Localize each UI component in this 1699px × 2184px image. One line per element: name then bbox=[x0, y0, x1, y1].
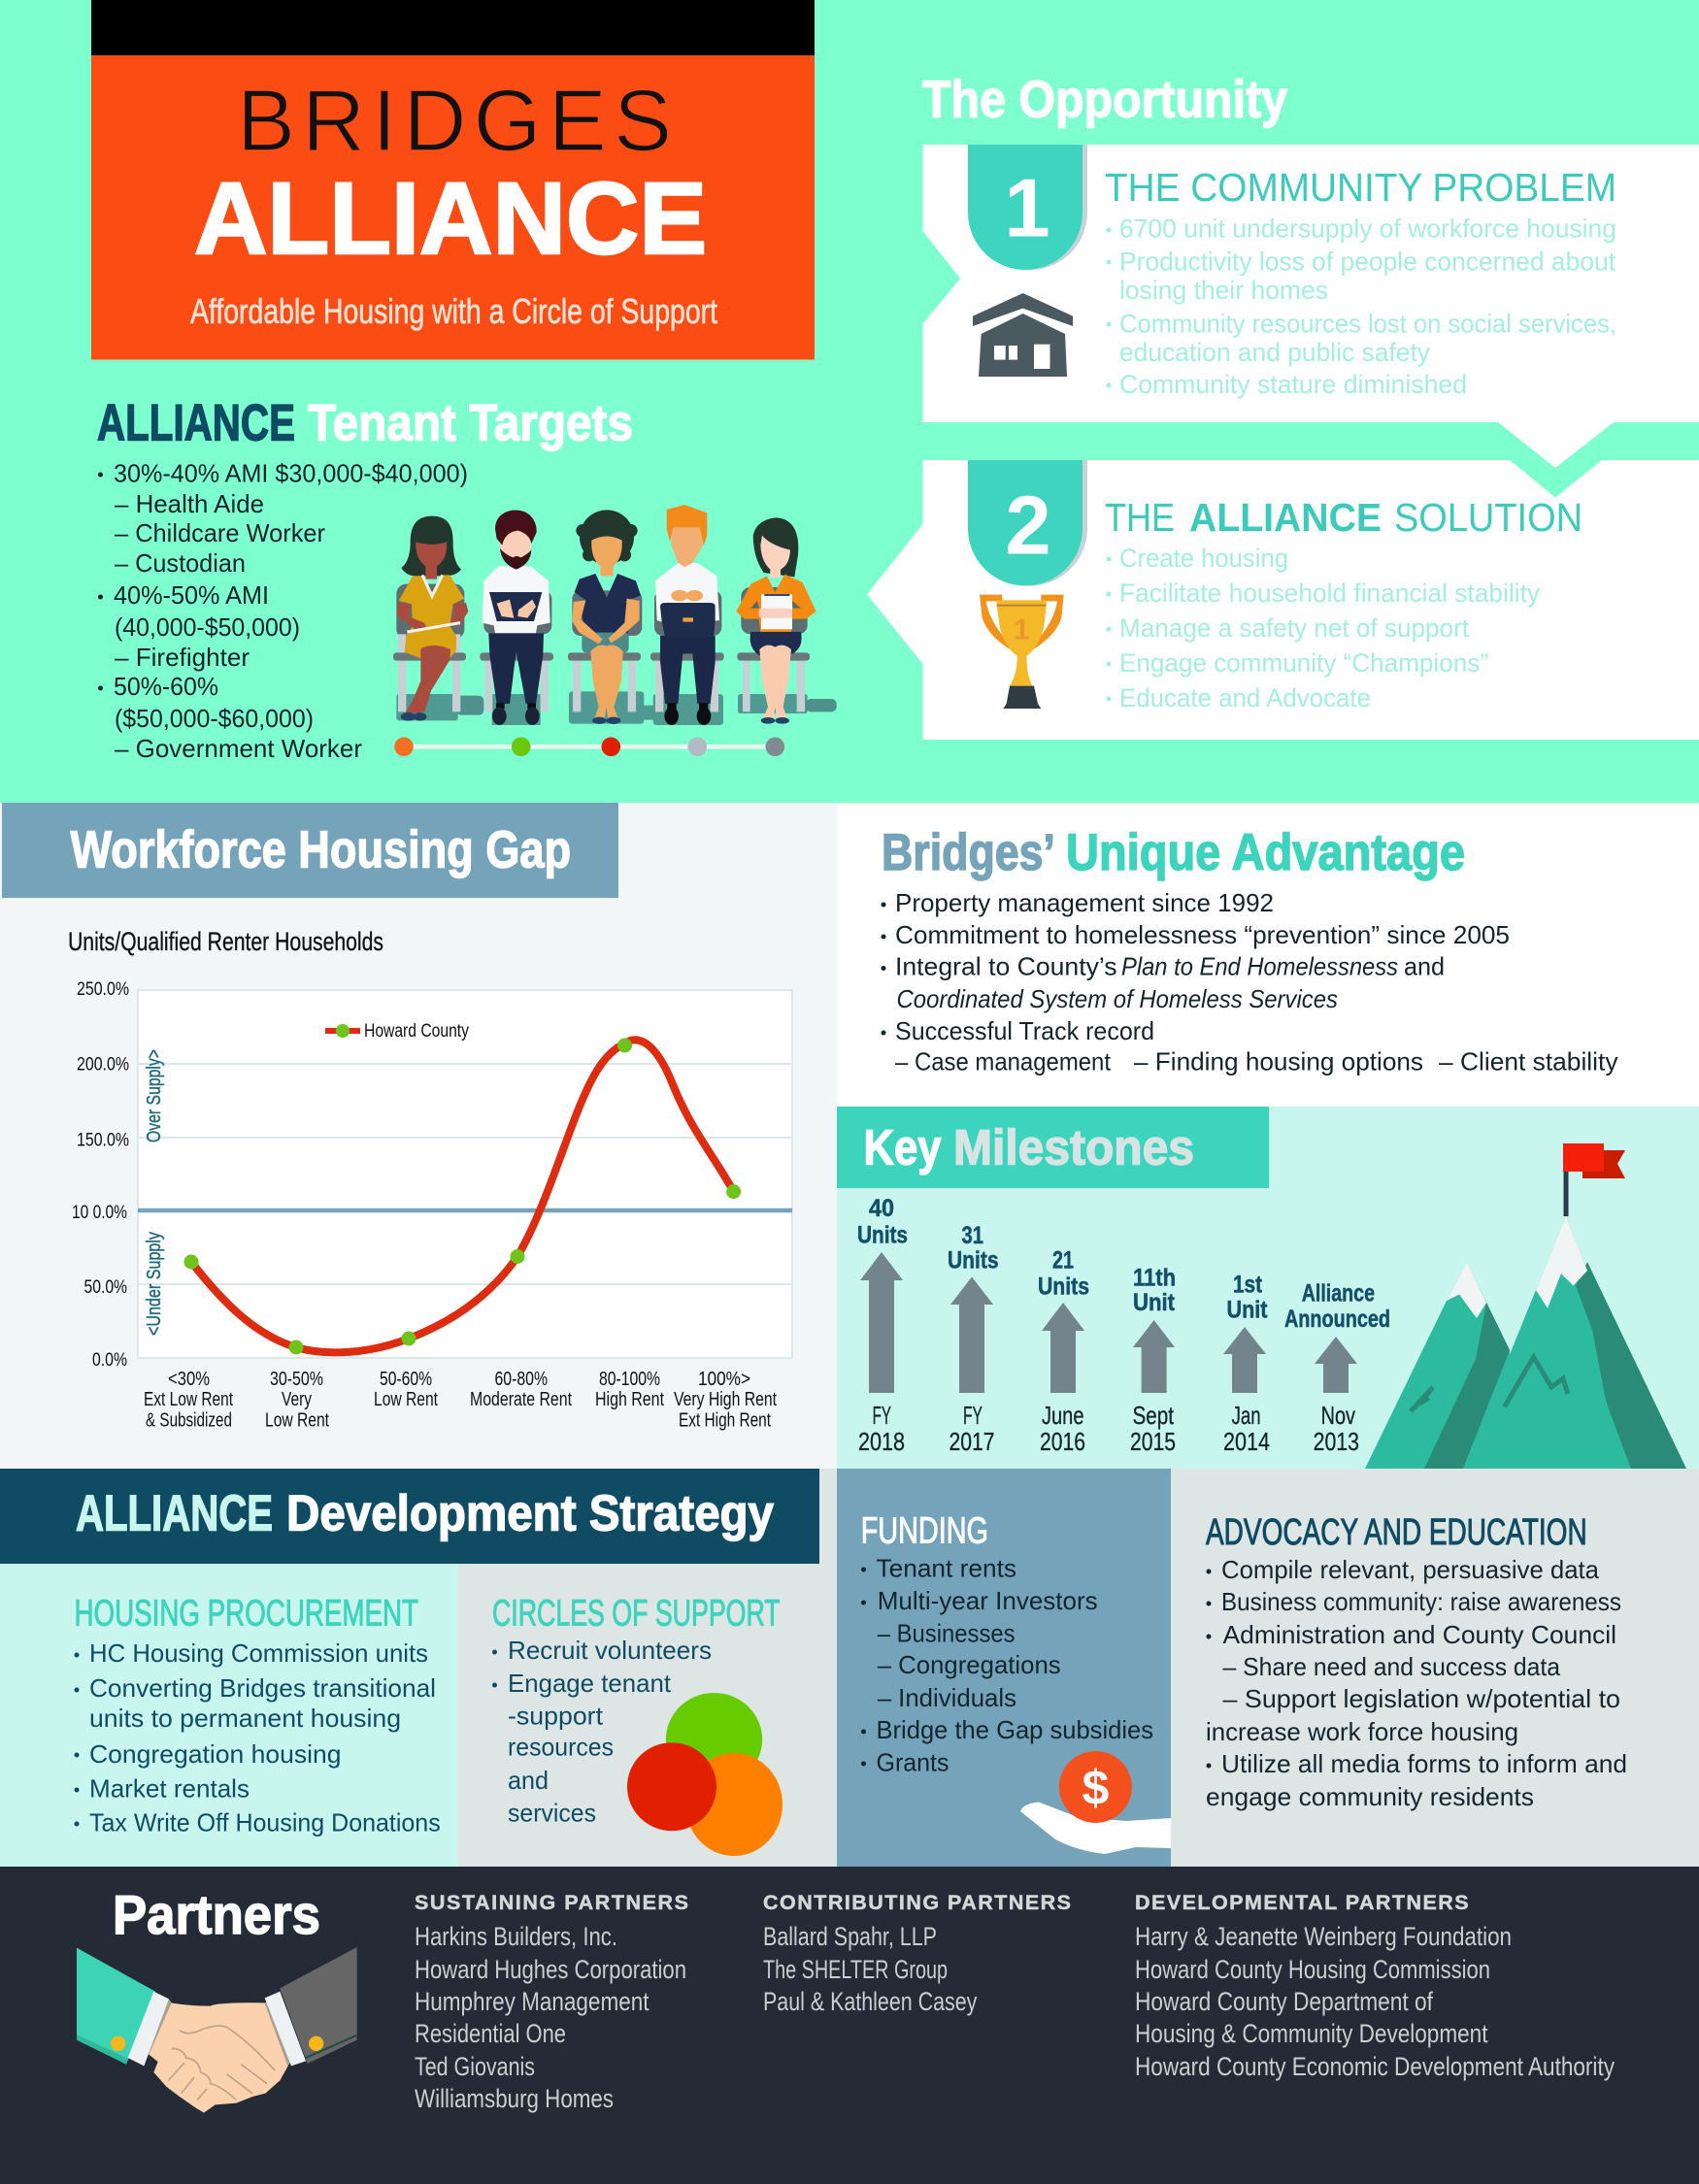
panel: workforce housing gap bbox=[0, 803, 837, 1469]
list: advocacy points: Administration and County Council bbox=[1223, 1620, 1616, 1649]
y axis labels: 200.0% bbox=[77, 1055, 129, 1075]
labels: milestone dates bbox=[858, 1401, 1359, 1456]
chart subtitle: Units/Qualified Renter Households bbox=[68, 927, 383, 956]
person 3 bbox=[568, 510, 660, 724]
person 4 bbox=[650, 505, 724, 725]
column: contributing partners: Ballard Spahr, LLP bbox=[763, 1922, 937, 1951]
labels: milestone dates: 2013 bbox=[1314, 1427, 1359, 1456]
axis annotation: over supply: Over Supply> bbox=[144, 1049, 165, 1142]
badge: 2: 2 bbox=[1005, 480, 1051, 573]
labels: milestone dates: FY bbox=[963, 1401, 983, 1430]
panel: partners footer bbox=[0, 1867, 1699, 2184]
labels: milestone dates: 2016 bbox=[1040, 1427, 1085, 1456]
list: advantages: – Finding housing options bbox=[1134, 1047, 1423, 1076]
list: housing procurement bbox=[74, 1638, 441, 1837]
heading band: workforce housing gap bbox=[2, 803, 618, 898]
labels: milestone values: 40 bbox=[869, 1195, 894, 1222]
list: advocacy points: – Support legislation w/potential to bbox=[1223, 1684, 1620, 1713]
list: community problem points: Community resources lost on social services, bbox=[1119, 309, 1616, 338]
labels: milestone dates: 2018 bbox=[858, 1427, 905, 1456]
list: advocacy points: Utilize all media forms to inform and bbox=[1221, 1749, 1627, 1778]
illustration: seated tenants bbox=[393, 505, 837, 756]
list: advantages: Plan to End Homelessness bbox=[1121, 951, 1398, 980]
labels: milestone dates: 2017 bbox=[949, 1427, 994, 1456]
list: circles of support: resources bbox=[508, 1733, 614, 1762]
column: sustaining partners bbox=[415, 1891, 688, 2113]
text block: tenant target list: (40,000-$50,000) bbox=[115, 612, 300, 642]
list: funding sources: – Businesses bbox=[878, 1618, 1016, 1647]
list: advocacy points: increase work force housing bbox=[1206, 1717, 1518, 1746]
badge: 2 bbox=[968, 460, 1083, 586]
labels: milestone values: Units bbox=[857, 1222, 908, 1249]
x axis labels: 100%> bbox=[698, 1369, 750, 1390]
list: circles of support: services bbox=[508, 1798, 596, 1827]
panel: key milestones bbox=[837, 1107, 1699, 1469]
x axis labels: Low Rent bbox=[374, 1389, 438, 1410]
column: sustaining partners: Ted Giovanis bbox=[415, 2052, 535, 2081]
badge: 1 bbox=[968, 145, 1083, 270]
list: solution points: Create housing bbox=[1119, 544, 1288, 573]
list: community problem points: Productivity loss of people concerned about bbox=[1119, 247, 1616, 276]
labels: milestone dates: 2014 bbox=[1223, 1427, 1270, 1456]
y axis labels: 50.0% bbox=[83, 1277, 127, 1298]
list: circles of support bbox=[492, 1636, 712, 1827]
heading band: development strategy: ALLIANCE bbox=[76, 1486, 273, 1542]
list: advantages: Coordinated System of Homeless Services bbox=[897, 984, 1338, 1013]
labels: milestone values: Unit bbox=[1227, 1297, 1268, 1324]
heading: bridges unique advantage: Bridges’ bbox=[882, 824, 1055, 881]
badge: 1: 1 bbox=[1004, 163, 1050, 254]
list: funding sources: Tenant rents bbox=[876, 1553, 1016, 1582]
list: housing procurement: units to permanent housing bbox=[89, 1704, 401, 1733]
list: advocacy points: Compile relevant, persuasive data bbox=[1221, 1555, 1600, 1584]
list: housing procurement: Congregation housing bbox=[89, 1739, 342, 1769]
labels: milestone values: Alliance bbox=[1302, 1279, 1375, 1307]
person 5 bbox=[736, 517, 837, 724]
line chart bbox=[72, 979, 792, 1431]
list: circles of support: -support bbox=[508, 1702, 604, 1731]
tagline: Affordable Housing with a Circle of Support bbox=[190, 291, 717, 331]
labels: milestone values: 31 bbox=[961, 1222, 983, 1249]
list: advantages bbox=[882, 888, 1617, 1076]
list: housing procurement: Converting Bridges transitional bbox=[89, 1673, 436, 1703]
column: sustaining partners: Harkins Builders, Inc. bbox=[415, 1922, 617, 1951]
labels: milestone values: Announced bbox=[1284, 1306, 1390, 1333]
y axis labels: 150.0% bbox=[77, 1131, 129, 1151]
list: circles of support: and bbox=[508, 1766, 549, 1795]
text block: tenant target list: 50%-60% bbox=[114, 672, 218, 701]
title: ALLIANCE: ALLIANCE bbox=[194, 162, 707, 276]
text block: tenant target list: ($50,000-$60,000) bbox=[115, 704, 314, 733]
list: advocacy points: Business community: raise awareness bbox=[1221, 1587, 1621, 1616]
list: community problem points: education and public safety bbox=[1119, 338, 1431, 367]
x axis labels: <30% bbox=[168, 1369, 210, 1390]
illustration: mountains and flag bbox=[1365, 1143, 1686, 1469]
x axis labels: 60-80% bbox=[495, 1369, 548, 1390]
column: developmental partners: Howard County Housing Commission bbox=[1135, 1955, 1490, 1984]
column: sustaining partners: SUSTAINING PARTNERS bbox=[415, 1891, 688, 1914]
panel: circles of support bbox=[458, 1564, 819, 1867]
labels: milestone dates: June bbox=[1042, 1401, 1083, 1430]
column: developmental partners: DEVELOPMENTAL PARTNERS bbox=[1135, 1891, 1469, 1914]
labels: milestone dates: Nov bbox=[1321, 1401, 1355, 1430]
column: sustaining partners: Humphrey Management bbox=[415, 1987, 650, 2016]
text block: tenant target list: – Government Worker bbox=[115, 734, 362, 763]
text block: tenant target list: – Childcare Worker bbox=[115, 518, 325, 547]
data points bbox=[184, 1039, 741, 1355]
list: circles of support: Recruit volunteers bbox=[508, 1636, 712, 1665]
list: funding sources: Bridge the Gap subsidies bbox=[876, 1715, 1153, 1744]
icon: trophy bbox=[980, 595, 1064, 709]
x axis labels: High Rent bbox=[595, 1389, 664, 1410]
icon: hand with coin: $ bbox=[1082, 1761, 1109, 1815]
x axis labels: & Subsidized bbox=[146, 1409, 232, 1431]
labels: milestone values bbox=[857, 1195, 1390, 1333]
panel: advocacy and education bbox=[1171, 1469, 1699, 1868]
x axis labels: Low Rent bbox=[265, 1409, 329, 1431]
column: sustaining partners: Howard Hughes Corporation bbox=[415, 1955, 686, 1984]
heading: the alliance solution: ALLIANCE bbox=[1189, 495, 1382, 540]
heading: Tenant Targets: Tenant Targets bbox=[308, 394, 633, 452]
heading: bridges unique advantage: Unique Advantage bbox=[1066, 824, 1465, 881]
list: funding sources: – Individuals bbox=[878, 1683, 1016, 1712]
list: solution points bbox=[1107, 544, 1541, 712]
labels: milestone dates: Sept bbox=[1132, 1401, 1175, 1430]
labels: milestone values: 21 bbox=[1052, 1247, 1074, 1274]
list: housing procurement: Tax Write Off Housing Donations bbox=[89, 1808, 441, 1837]
icon: trophy: 1 bbox=[1014, 614, 1030, 646]
icon: hand with coin bbox=[1020, 1751, 1171, 1854]
y axis labels bbox=[72, 979, 129, 1371]
heading: the alliance solution: SOLUTION bbox=[1394, 495, 1582, 540]
header: logo block bbox=[91, 0, 815, 359]
list: community problem points bbox=[1107, 215, 1616, 399]
list: housing procurement: Market rentals bbox=[89, 1774, 250, 1803]
panel: funding bbox=[837, 1469, 1171, 1868]
list: solution points: Educate and Advocate bbox=[1119, 683, 1371, 712]
column: sustaining partners: Residential One bbox=[415, 2019, 566, 2048]
heading band: development strategy bbox=[0, 1469, 819, 1564]
arrows: milestones bbox=[860, 1252, 1357, 1393]
panel: unique advantage bbox=[837, 803, 1699, 1107]
column: contributing partners: The SHELTER Group bbox=[763, 1955, 948, 1984]
heading: the community problem: THE COMMUNITY PROBLEM bbox=[1105, 165, 1616, 210]
heading band: workforce housing gap: Workforce Housing Gap bbox=[70, 821, 571, 879]
list: advantages: Property management since 1992 bbox=[895, 888, 1274, 917]
person 1 bbox=[393, 516, 483, 721]
icon: overlapping circles bbox=[627, 1693, 783, 1856]
list: advantages: Successful Track record bbox=[895, 1016, 1154, 1045]
labels: milestone dates: FY bbox=[873, 1401, 891, 1430]
column: developmental partners: Housing & Community Development bbox=[1135, 2019, 1488, 2048]
panel: circles of support: CIRCLES OF SUPPORT bbox=[492, 1594, 781, 1635]
heading: Tenant Targets bbox=[97, 394, 633, 452]
column: contributing partners bbox=[763, 1891, 1071, 2016]
text block: tenant target list bbox=[98, 458, 468, 763]
icon: house bbox=[973, 293, 1073, 377]
list: advocacy points: engage community residents bbox=[1206, 1782, 1534, 1811]
list: funding sources: – Congregations bbox=[878, 1650, 1061, 1679]
timeline dots bbox=[394, 738, 784, 756]
y axis labels: 250.0% bbox=[77, 979, 129, 1000]
heading: partners: Partners bbox=[113, 1884, 320, 1946]
legend bbox=[325, 1021, 469, 1042]
list: funding sources: Multi-year Investors bbox=[878, 1586, 1098, 1615]
text block: tenant target list: 30%-40% AMI $30,000-$40,000) bbox=[114, 458, 468, 487]
column: developmental partners bbox=[1135, 1891, 1615, 2081]
x axis labels: 80-100% bbox=[599, 1369, 660, 1390]
person 2 bbox=[480, 511, 553, 725]
text block: tenant target list: 40%-50% AMI bbox=[114, 580, 269, 610]
title: BRIDGES: BRIDGES bbox=[237, 73, 672, 170]
list: housing procurement: HC Housing Commission units bbox=[89, 1638, 428, 1668]
list: solution points: Facilitate household financial stability bbox=[1119, 579, 1541, 608]
axis annotation: under supply: <Under Supply bbox=[144, 1232, 165, 1336]
icon: handshake bbox=[77, 1947, 357, 2113]
text block: tenant target list: – Custodian bbox=[115, 548, 246, 578]
labels: milestone dates: 2015 bbox=[1130, 1427, 1176, 1456]
x axis labels bbox=[144, 1369, 777, 1431]
panel: the alliance solution bbox=[867, 460, 1699, 740]
heading band: development strategy: Development Strategy bbox=[286, 1486, 774, 1542]
list: funding sources bbox=[861, 1553, 1153, 1776]
list: solution points: Engage community “Champions” bbox=[1119, 648, 1488, 678]
heading band: key milestones: Milestones bbox=[953, 1120, 1194, 1175]
labels: milestone dates: Jan bbox=[1232, 1401, 1261, 1430]
labels: milestone values: Unit bbox=[1133, 1289, 1176, 1316]
heading band: key milestones: Key bbox=[864, 1120, 942, 1175]
x axis labels: Moderate Rent bbox=[470, 1389, 572, 1410]
panel: housing procurement: HOUSING PROCUREMENT bbox=[74, 1594, 418, 1635]
list: advantages: – Client stability bbox=[1439, 1047, 1617, 1076]
x axis labels: Ext Low Rent bbox=[144, 1389, 233, 1410]
column: contributing partners: CONTRIBUTING PARTNERS bbox=[763, 1891, 1071, 1914]
labels: milestone values: 1st bbox=[1233, 1272, 1263, 1299]
x axis labels: Ext High Rent bbox=[679, 1409, 771, 1431]
heading: the alliance solution bbox=[1105, 495, 1582, 540]
x axis labels: 50-60% bbox=[380, 1369, 432, 1390]
list: advantages: Integral to County’s bbox=[895, 951, 1117, 980]
list: solution points: Manage a safety net of support bbox=[1119, 613, 1470, 643]
column: developmental partners: Howard County Economic Development Authority bbox=[1135, 2052, 1615, 2081]
x axis labels: Very High Rent bbox=[674, 1389, 777, 1410]
labels: milestone values: Units bbox=[948, 1247, 998, 1274]
list: circles of support: Engage tenant bbox=[508, 1669, 672, 1698]
labels: milestone values: 11th bbox=[1133, 1264, 1176, 1291]
panel: development strategy bbox=[0, 1469, 837, 1867]
heading: The Opportunity: The Opportunity bbox=[922, 71, 1287, 129]
x axis labels: Very bbox=[282, 1389, 312, 1410]
list: community problem points: losing their homes bbox=[1119, 276, 1328, 305]
list: community problem points: 6700 unit undersupply of workforce housing bbox=[1119, 215, 1616, 244]
text block: tenant target list: – Firefighter bbox=[115, 643, 250, 672]
legend: Howard County bbox=[364, 1021, 469, 1042]
heading band: key milestones bbox=[837, 1107, 1269, 1188]
list: advocacy points: – Share need and success data bbox=[1223, 1652, 1561, 1681]
panel: housing procurement bbox=[0, 1564, 458, 1867]
heading: bridges unique advantage bbox=[882, 824, 1465, 881]
column: developmental partners: Harry & Jeanette Weinberg Foundation bbox=[1135, 1922, 1512, 1951]
list: advantages: Commitment to homelessness “prevention” since 2005 bbox=[895, 920, 1510, 949]
y axis labels: 0.0% bbox=[92, 1350, 127, 1371]
list: advocacy points bbox=[1206, 1555, 1627, 1811]
panel: the community problem bbox=[922, 145, 1699, 468]
list: advantages: – Case management bbox=[895, 1047, 1112, 1076]
data line bbox=[191, 1040, 734, 1352]
text block: tenant target list: – Health Aide bbox=[115, 489, 264, 518]
column: contributing partners: Paul & Kathleen Casey bbox=[763, 1987, 978, 2016]
heading: Tenant Targets: ALLIANCE bbox=[97, 394, 295, 452]
x axis labels: 30-50% bbox=[270, 1369, 323, 1390]
y axis labels: 10 0.0% bbox=[72, 1203, 127, 1223]
list: funding sources: Grants bbox=[876, 1747, 949, 1776]
list: advantages: and bbox=[1404, 951, 1445, 980]
heading: the alliance solution: THE bbox=[1105, 495, 1175, 540]
heading: funding: FUNDING bbox=[861, 1510, 988, 1551]
column: sustaining partners: Williamsburg Homes bbox=[415, 2084, 614, 2113]
labels: milestone values: Units bbox=[1038, 1273, 1089, 1300]
column: developmental partners: Howard County Department of bbox=[1135, 1987, 1433, 2016]
list: community problem points: Community stature diminished bbox=[1119, 370, 1467, 399]
